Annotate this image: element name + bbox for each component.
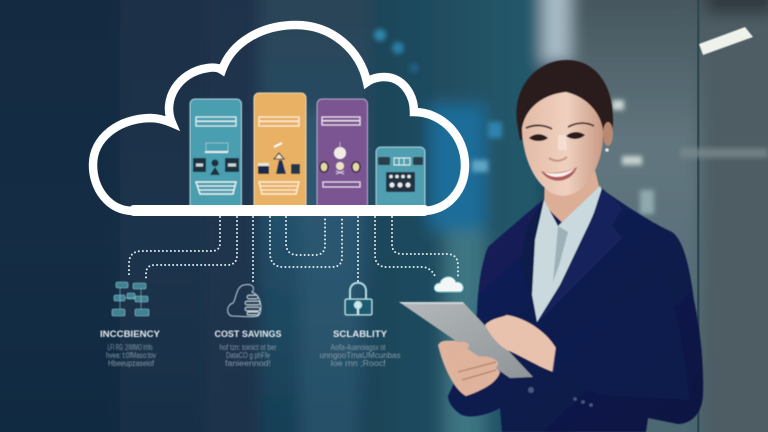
feature: scalability text: unngooTmaUMcunbas (320, 351, 400, 360)
feature: scalability text: SCLABLITY (333, 329, 387, 339)
column: purple server (317, 99, 368, 215)
feature: cost savings text: COST SAVINGS (214, 329, 282, 339)
icon: cloud with coin stack (228, 285, 261, 317)
tablet (399, 302, 533, 378)
person: businesswoman with tablet (399, 60, 703, 432)
smile (541, 167, 577, 181)
column: teal control unit (376, 147, 425, 215)
jacket sleeve detail (552, 270, 690, 400)
column: orange server (254, 93, 306, 215)
feature: scalability text: Ioe rnn ;Roocf (330, 359, 386, 368)
feature: incbiency text (100, 329, 160, 368)
feature: scalability text (320, 329, 400, 368)
hair (516, 60, 613, 140)
neck (544, 170, 600, 232)
feature: cost savings text: hof tzn: toinict ot ber (220, 343, 277, 352)
jacket lapel (538, 188, 622, 322)
feature: scalability text: Aoifa-4uanoiagsx ot (330, 343, 386, 352)
face (522, 92, 603, 196)
eyebrows (526, 123, 594, 129)
cloud outline (93, 25, 465, 211)
fingers over tablet (449, 342, 498, 390)
feature: incbiency text: hvea: t:0fMaso:tov (106, 351, 156, 360)
jacket (448, 188, 703, 432)
feature: cost savings text (214, 329, 282, 368)
shirt (531, 186, 603, 322)
feature: incbiency text: Hbeeupzaseiof (108, 359, 155, 368)
pointing hand (485, 315, 556, 372)
feature: cost savings text: fanieennod! (225, 359, 271, 368)
eyes (529, 132, 585, 141)
ear (603, 122, 613, 146)
icon: padlock (345, 283, 372, 315)
column: teal server (190, 99, 242, 215)
feature: incbiency text: INCCBIENCY (100, 329, 160, 339)
right hand behind tablet (438, 340, 500, 396)
icon: small cloud (434, 277, 463, 292)
feature: cost savings text: DataCO g phFfe (226, 351, 270, 360)
cloud diagram with server columns (93, 25, 465, 215)
feature: incbiency text: LFI RG: 2/MIMO Irhfo (108, 343, 153, 352)
dotted connector lines (129, 217, 458, 283)
nose highlight (558, 135, 567, 150)
icon: network nodes (112, 282, 149, 316)
